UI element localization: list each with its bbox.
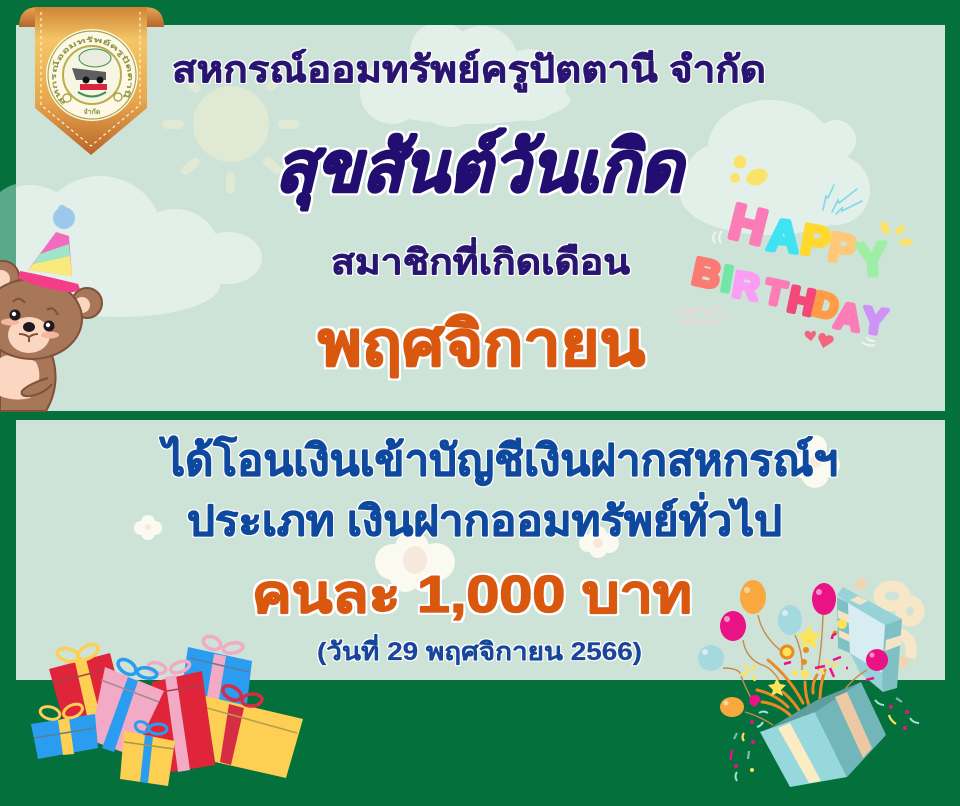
gift: back red: [49, 641, 130, 745]
icon: happy birthday lettering: P: [825, 225, 859, 273]
gift: back blue: [180, 634, 252, 712]
cloud: right: [680, 100, 870, 235]
icon: sun: [162, 77, 300, 194]
icon: happy birthday lettering: [676, 156, 913, 348]
text: account type: ประเภท เงินฝากออมทรัพย์ทั่วไป: [187, 492, 782, 544]
gift: centre red: [140, 659, 215, 772]
head: [0, 279, 82, 359]
ribbon tabs: [19, 7, 164, 27]
open box: [760, 682, 886, 787]
cooperative seal: จำกัด: [84, 108, 101, 116]
icon: happy birthday lettering: R: [730, 263, 763, 308]
icon: happy birthday lettering: H: [785, 278, 819, 324]
cooperative seal: [46, 29, 138, 121]
gift: small blue: [31, 701, 98, 759]
icon: happy birthday lettering: P: [798, 215, 833, 266]
panel: top greeting: [0, 7, 945, 412]
gift: pink with blue ribbon: [90, 656, 164, 756]
streamers and stars: [740, 619, 874, 717]
icon: happy birthday lettering: Y: [860, 299, 889, 343]
gift: small yellow: [120, 720, 175, 786]
cloud: left: [0, 176, 262, 317]
text: date: (วันที่ 29 พฤศจิกายน 2566): [317, 634, 642, 666]
icon: happy birthday lettering: I: [719, 258, 736, 300]
flying lid: [837, 587, 902, 692]
cloud: top centre: [360, 22, 570, 127]
decorative flowers: [134, 435, 840, 592]
icon: happy birthday lettering: D: [809, 285, 842, 328]
icon: happy birthday lettering: B: [689, 251, 724, 298]
icon: happy birthday lettering: A: [765, 211, 802, 263]
ribbon body: [35, 7, 147, 155]
illustration: open gift box with balloons: [698, 580, 919, 787]
text: members born in month: สมาชิกที่เกิดเดือน: [331, 237, 630, 282]
text: transfer notice: ได้โอนเงินเข้าบัญชีเงินฝากสหกรณ์ฯ: [159, 434, 838, 486]
panel: bottom message: [16, 420, 945, 680]
icon: happy birthday lettering: Y: [855, 232, 889, 286]
cloud overflow on left margin: [0, 184, 16, 320]
party hat: [18, 205, 80, 292]
bow behind lid: [858, 580, 919, 664]
illustration: bear with party hat: [0, 205, 102, 411]
emblem: ribbon banner with seal: [19, 7, 164, 155]
body: [0, 345, 56, 411]
ribbon stitching: [41, 12, 140, 146]
ears: [0, 261, 19, 293]
text: amount: คนละ 1,000 บาท: [252, 566, 692, 624]
balloons: [698, 580, 888, 725]
heading: month: พฤศจิกายน: [318, 310, 645, 379]
confetti: [731, 698, 919, 781]
gift: large yellow: [205, 683, 303, 778]
heading: happy birthday thai: สุขสันต์วันเกิด: [275, 128, 686, 211]
illustration: pile of gifts: [31, 634, 303, 786]
icon: happy birthday lettering: T: [761, 272, 790, 314]
icon: happy birthday lettering: H: [724, 193, 772, 256]
cooperative seal: สหกรณ์ออมทรัพย์ครูปัตตานี: [52, 36, 132, 105]
icon: happy birthday lettering: A: [832, 294, 865, 339]
heading: cooperative name: สหกรณ์ออมทรัพย์ครูปัตตานี จำกัด: [172, 49, 766, 93]
